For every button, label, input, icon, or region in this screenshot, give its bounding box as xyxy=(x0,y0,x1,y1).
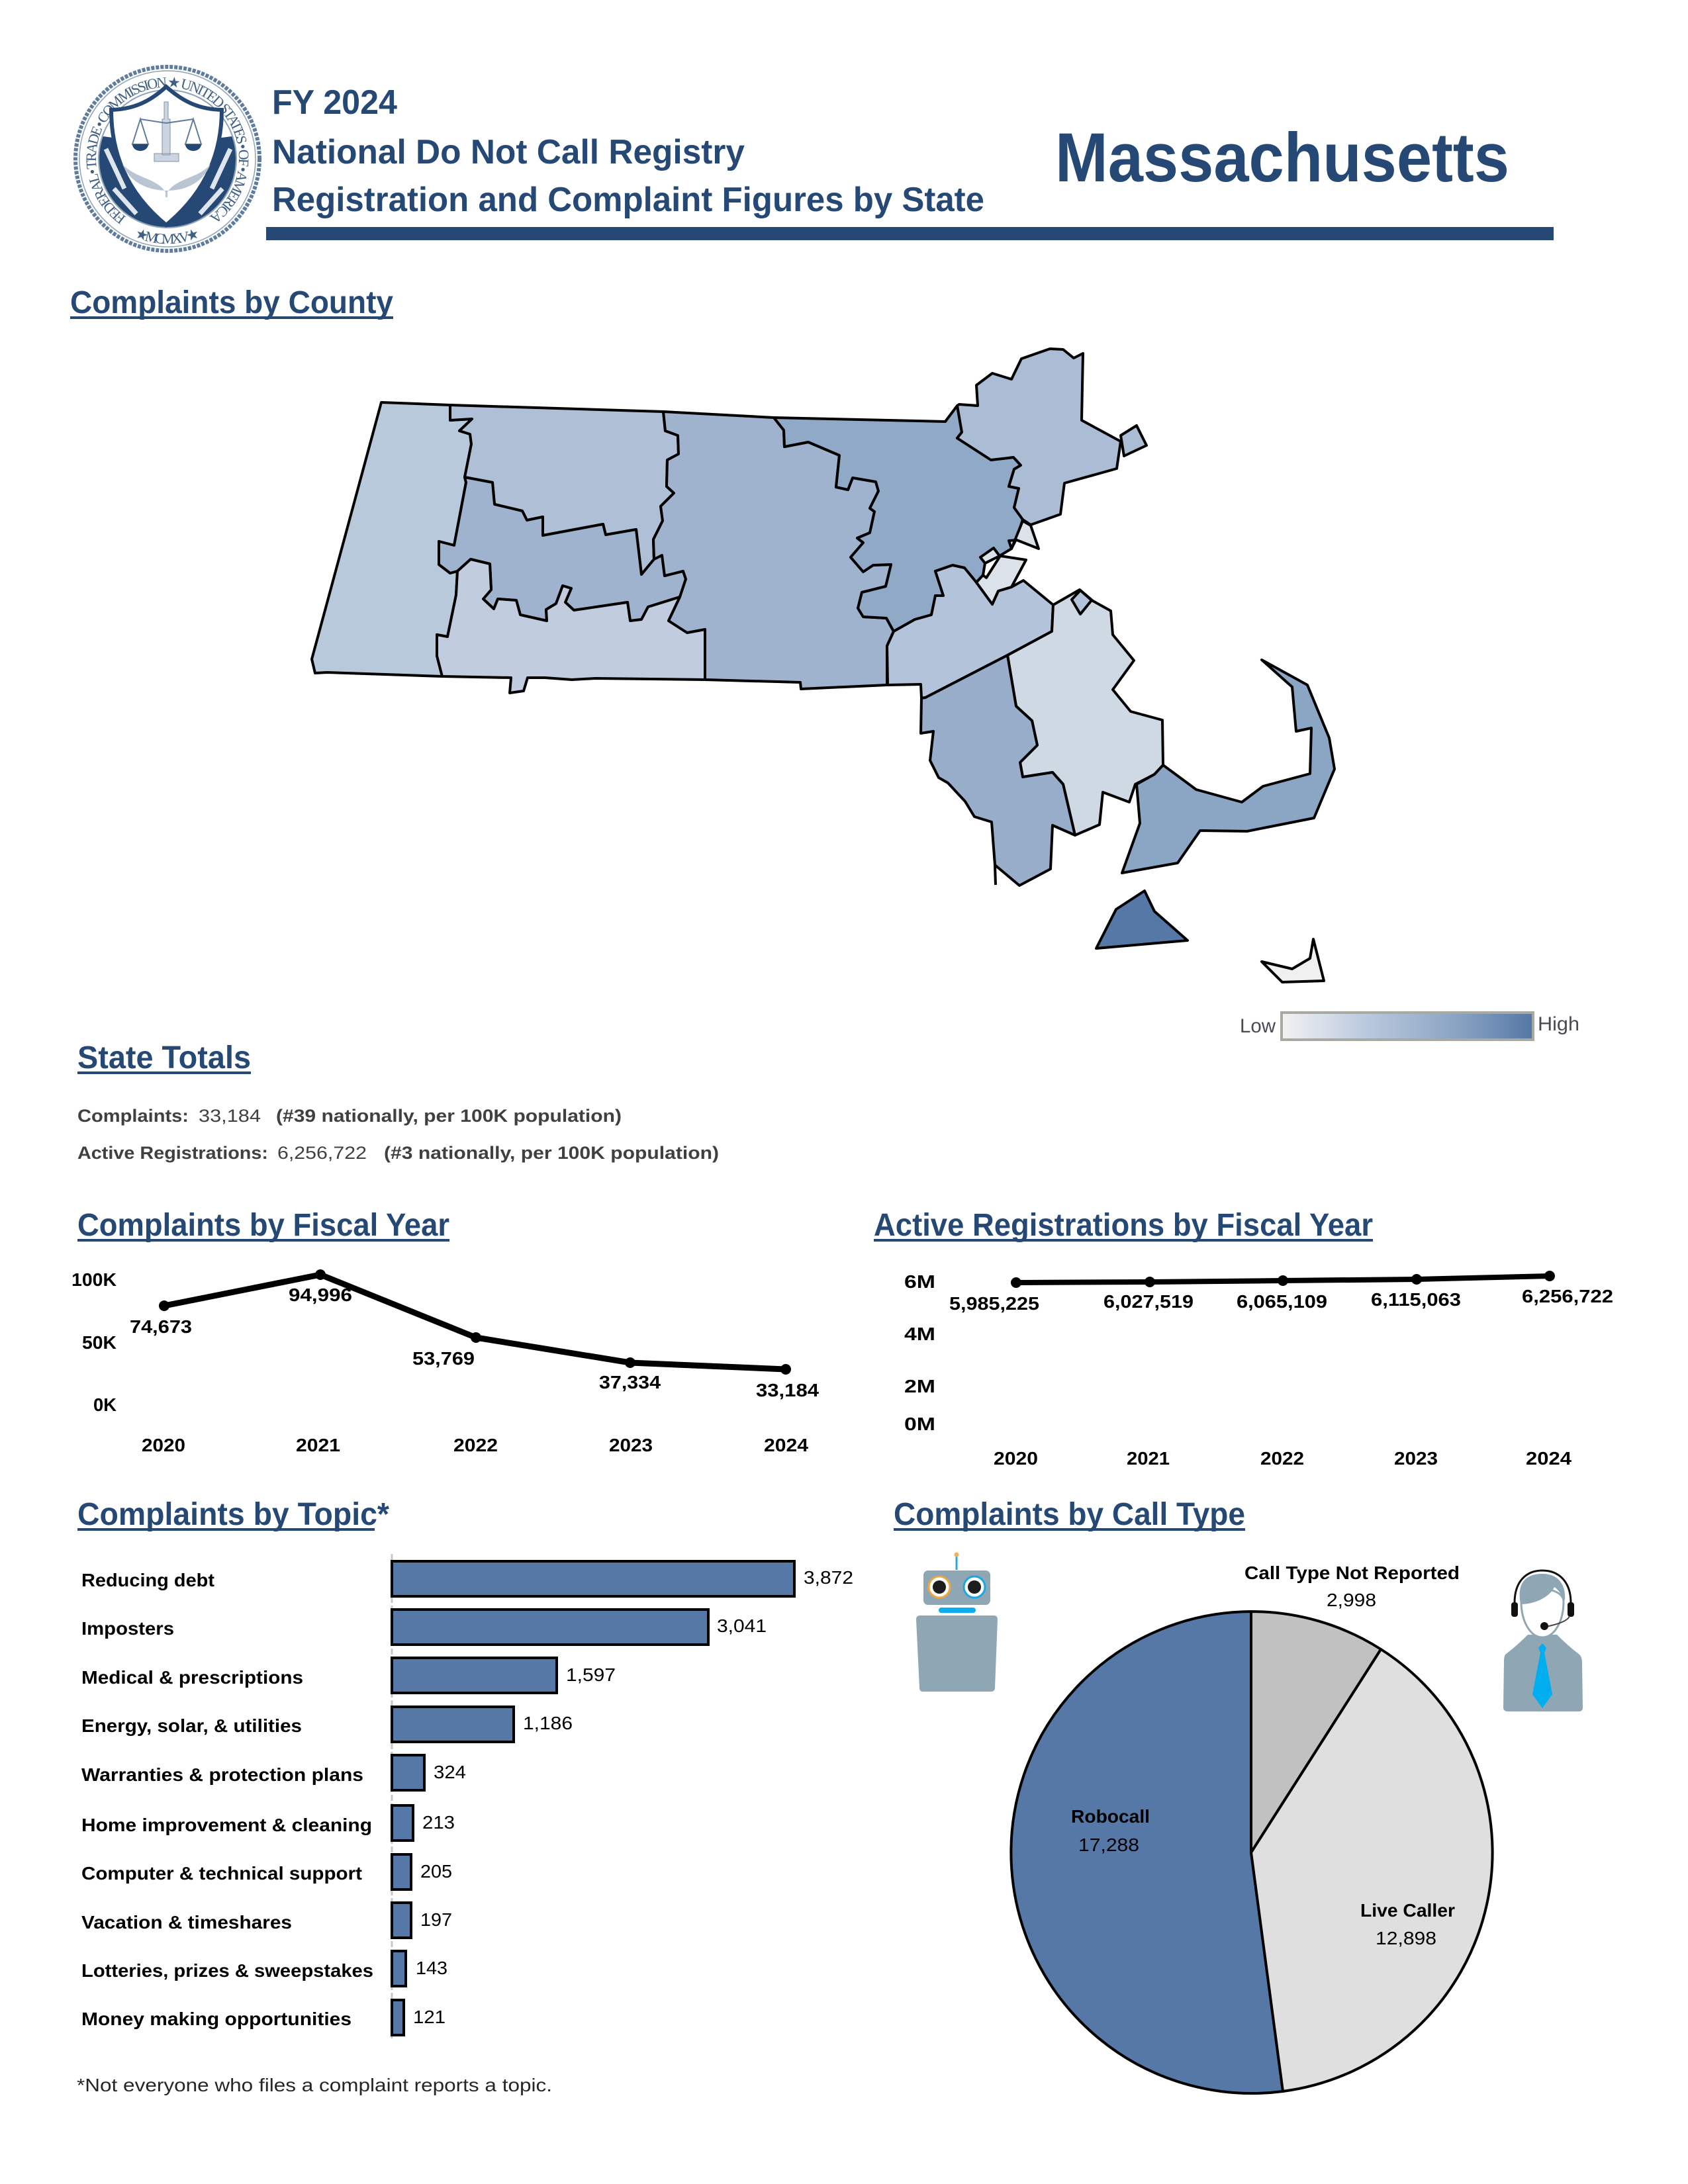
state totals text: (#39 nationally, per 100K population) xyxy=(276,1106,622,1126)
value labels: 213 xyxy=(422,1812,455,1833)
map legend xyxy=(1240,1013,1579,1040)
bars xyxy=(392,1561,794,2035)
y axis labels: 50K xyxy=(82,1332,117,1353)
county: Franklin xyxy=(450,405,679,574)
county: Hampshire xyxy=(439,477,686,621)
y axis labels: 0M xyxy=(904,1414,935,1434)
data labels: 6,256,722 xyxy=(1522,1286,1613,1306)
x axis labels xyxy=(994,1448,1571,1469)
legend label high: High xyxy=(1538,1013,1579,1035)
value labels: 1,186 xyxy=(523,1713,573,1733)
pie labels xyxy=(1071,1563,1460,1948)
value labels: 121 xyxy=(413,2007,445,2027)
county map xyxy=(312,349,1335,982)
x axis labels: 2020 xyxy=(994,1448,1038,1469)
county: Norfolk xyxy=(887,565,1053,698)
topic labels: Computer & technical support xyxy=(81,1863,362,1884)
data labels: 94,996 xyxy=(289,1285,352,1305)
y axis labels: 6M xyxy=(904,1271,935,1292)
FTC seal: FEDERAL • TRADE • COMMISSION ★ UNITED STATES • OF • AMERICA xyxy=(86,77,249,224)
y axis labels: 4M xyxy=(904,1324,935,1344)
county: Hampden xyxy=(437,559,705,693)
county: Suffolk, Boston xyxy=(976,556,1026,604)
topic labels: Money making opportunities xyxy=(81,2009,352,2029)
topic labels: Vacation & timeshares xyxy=(81,1912,292,1933)
x axis labels: 2024 xyxy=(764,1435,808,1455)
data labels: 33,184 xyxy=(756,1380,819,1400)
y axis labels: 2M xyxy=(904,1376,935,1396)
county: Essex, Cape Ann xyxy=(1121,426,1147,456)
state totals text: (#3 nationally, per 100K population) xyxy=(384,1143,719,1163)
y axis labels xyxy=(904,1271,935,1434)
pie labels: 17,288 xyxy=(1078,1835,1139,1855)
heading: State Totals: State Totals xyxy=(77,1040,251,1075)
x axis labels: 2023 xyxy=(1394,1448,1438,1469)
title line: National Do Not Call Registry: National Do Not Call Registry xyxy=(272,133,745,171)
data labels: 6,115,063 xyxy=(1371,1289,1461,1310)
county: Bristol, Westport sliver xyxy=(995,865,996,885)
y axis labels xyxy=(71,1269,117,1415)
county: Barnstable xyxy=(1122,660,1335,873)
slice: Robocall xyxy=(1011,1612,1283,2093)
pie labels: 12,898 xyxy=(1376,1928,1436,1948)
FTC seal: ★MCMXV★ xyxy=(137,229,197,244)
heading: Complaints by County: Complaints by County xyxy=(70,285,393,320)
topic labels: Medical & prescriptions xyxy=(81,1667,303,1688)
footnote: *Not everyone who files a complaint reports a topic. xyxy=(77,2075,552,2095)
county: Dukes xyxy=(1096,891,1188,948)
title line: Registration and Complaint Figures by State: Registration and Complaint Figures by State xyxy=(272,181,984,219)
value labels: 143 xyxy=(416,1958,447,1978)
topic labels: Home improvement & cleaning xyxy=(81,1815,372,1835)
county: Worcester xyxy=(653,412,894,689)
data labels xyxy=(130,1285,819,1400)
pie labels: 2,998 xyxy=(1327,1590,1376,1610)
legend gradient bar xyxy=(1282,1013,1533,1040)
data labels: 6,065,109 xyxy=(1237,1291,1327,1312)
icon: call agent xyxy=(1503,1570,1583,1711)
x axis labels: 2020 xyxy=(142,1435,185,1455)
y axis labels: 100K xyxy=(71,1269,117,1290)
bar chart: complaints by topic xyxy=(81,1554,853,2038)
title line: FY 2024: FY 2024 xyxy=(272,83,397,122)
data labels: 5,985,225 xyxy=(949,1293,1039,1314)
pie labels: Robocall xyxy=(1071,1806,1150,1827)
county: Suffolk, Revere xyxy=(1009,521,1039,549)
state totals text: Active Registrations: xyxy=(77,1143,268,1163)
topic labels: Warranties & protection plans xyxy=(81,1764,363,1785)
axis line xyxy=(391,1554,393,2038)
topic labels: Imposters xyxy=(81,1618,174,1639)
county: Middlesex xyxy=(774,406,1023,631)
topic labels: Lotteries, prizes & sweepstakes xyxy=(81,1960,373,1981)
y axis labels: 0K xyxy=(93,1394,117,1415)
x axis labels: 2022 xyxy=(453,1435,498,1455)
data labels: 37,334 xyxy=(599,1372,661,1392)
county: Suffolk, Chelsea xyxy=(980,548,1000,563)
data labels: 6,027,519 xyxy=(1103,1291,1194,1312)
trend line xyxy=(159,1269,791,1375)
value labels: 3,041 xyxy=(717,1615,767,1636)
trend line xyxy=(1011,1271,1555,1288)
value labels: 324 xyxy=(434,1762,466,1782)
icon: robot xyxy=(916,1553,998,1692)
county: Plymouth xyxy=(1008,590,1163,835)
state totals text: 33,184 xyxy=(199,1106,261,1126)
x axis labels: 2023 xyxy=(609,1435,653,1455)
x axis labels: 2024 xyxy=(1526,1448,1571,1469)
county: Berkshire xyxy=(312,402,472,676)
heading: Complaints by Topic: Complaints by Topic* xyxy=(77,1497,389,1532)
heading: Complaints by Call Type: Complaints by Call Type xyxy=(894,1497,1245,1532)
x axis labels: 2021 xyxy=(1127,1448,1170,1469)
value labels: 205 xyxy=(420,1861,452,1882)
county: Essex xyxy=(957,349,1121,525)
state name: Massachusetts xyxy=(1055,119,1509,197)
value labels: 1,597 xyxy=(566,1664,616,1685)
line chart: active registrations by fiscal year xyxy=(904,1271,1613,1469)
topic labels xyxy=(81,1570,373,2029)
data labels xyxy=(949,1286,1613,1314)
slice: Call Type Not Reported xyxy=(1251,1612,1381,1852)
x axis labels: 2022 xyxy=(1260,1448,1304,1469)
heading: Complaints by Fiscal Year: Complaints by Fiscal Year xyxy=(77,1208,449,1243)
header rule xyxy=(266,227,1554,240)
state totals text xyxy=(77,1106,719,1163)
state totals text: Complaints: xyxy=(77,1106,189,1126)
legend label low: Low xyxy=(1240,1015,1276,1037)
pie labels: Live Caller xyxy=(1360,1900,1455,1921)
x axis labels: 2021 xyxy=(296,1435,340,1455)
topic labels: Reducing debt xyxy=(81,1570,214,1590)
value labels xyxy=(413,1567,853,2027)
header title block xyxy=(272,83,984,219)
state totals text: 6,256,722 xyxy=(277,1143,367,1163)
topic labels: Energy, solar, & utilities xyxy=(81,1715,302,1736)
county: Nantucket xyxy=(1262,939,1324,982)
county: Bristol xyxy=(921,655,1075,886)
heading: Active Registrations by Fiscal Year: Active Registrations by Fiscal Year xyxy=(874,1208,1373,1243)
pie chart: complaints by call type xyxy=(1011,1612,1493,2093)
data labels: 53,769 xyxy=(412,1348,475,1369)
x axis labels xyxy=(142,1435,808,1455)
line chart: complaints by fiscal year xyxy=(71,1269,819,1455)
value labels: 197 xyxy=(420,1909,452,1930)
slice: Live Caller xyxy=(1251,1649,1493,2091)
county: Norfolk, Hull xyxy=(1072,590,1092,614)
pie labels: Call Type Not Reported xyxy=(1244,1563,1460,1583)
value labels: 3,872 xyxy=(804,1567,853,1588)
data labels: 74,673 xyxy=(130,1316,192,1337)
